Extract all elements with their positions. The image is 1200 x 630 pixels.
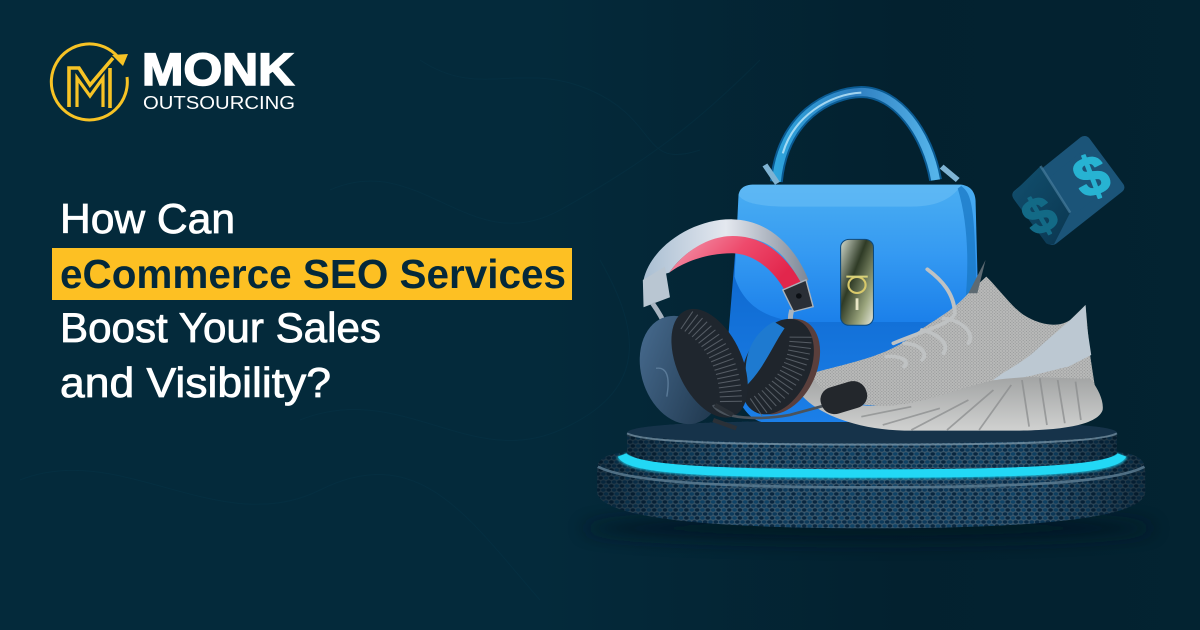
left cushion ribs: [686, 320, 731, 403]
dollar cube: [1012, 142, 1118, 246]
bag handle: [776, 92, 936, 182]
headband sliders: [643, 267, 670, 307]
podium top surface: [627, 421, 1117, 443]
podium shadow: [583, 515, 1154, 542]
headline line: Boost Your Sales: Boost Your Sales: [60, 304, 381, 351]
podium upper tier: [627, 421, 1117, 469]
highlight: eCommerce SEO Services: eCommerce SEO Services: [60, 251, 566, 297]
bag flap: [735, 185, 978, 322]
logo wordmark: [142, 44, 295, 113]
bag clasp: [841, 239, 873, 325]
logo wordmark: OUTSOURCING: [143, 93, 295, 113]
podium glowing ring: [622, 455, 1122, 473]
podium lower tier: [597, 453, 1145, 528]
sneaker upper: [811, 277, 1097, 413]
right cup blue opening: [746, 322, 785, 385]
left ear cup shell: [628, 308, 734, 432]
illustration: products on a podium: [583, 92, 1154, 542]
sneaker: [803, 260, 1103, 431]
right ear cup: [731, 308, 834, 425]
logo wordmark: MONK: [142, 44, 295, 95]
sneaker laces: [886, 269, 970, 367]
bag body: [727, 247, 977, 422]
right cushion ribs: [754, 337, 801, 408]
handbag: [727, 92, 978, 422]
microphone foam: [817, 378, 871, 417]
headline line: and Visibility?: and Visibility?: [60, 359, 331, 406]
headband red padding: [669, 236, 801, 290]
dollar sign right face: $: [1065, 142, 1118, 211]
headline: [52, 195, 572, 406]
logo emblem: [51, 44, 128, 120]
left cushion: [656, 299, 763, 428]
headband outer: [644, 219, 808, 284]
podium: [597, 421, 1145, 528]
sneaker heel counter: [993, 305, 1091, 380]
headline line: How Can: How Can: [60, 195, 235, 242]
headphones: [628, 219, 871, 432]
microphone boom: [713, 403, 833, 418]
dollar sign left face: $: [1012, 184, 1067, 246]
sneaker sole: [803, 377, 1103, 431]
logo: Monk Outsourcing: [51, 44, 295, 120]
